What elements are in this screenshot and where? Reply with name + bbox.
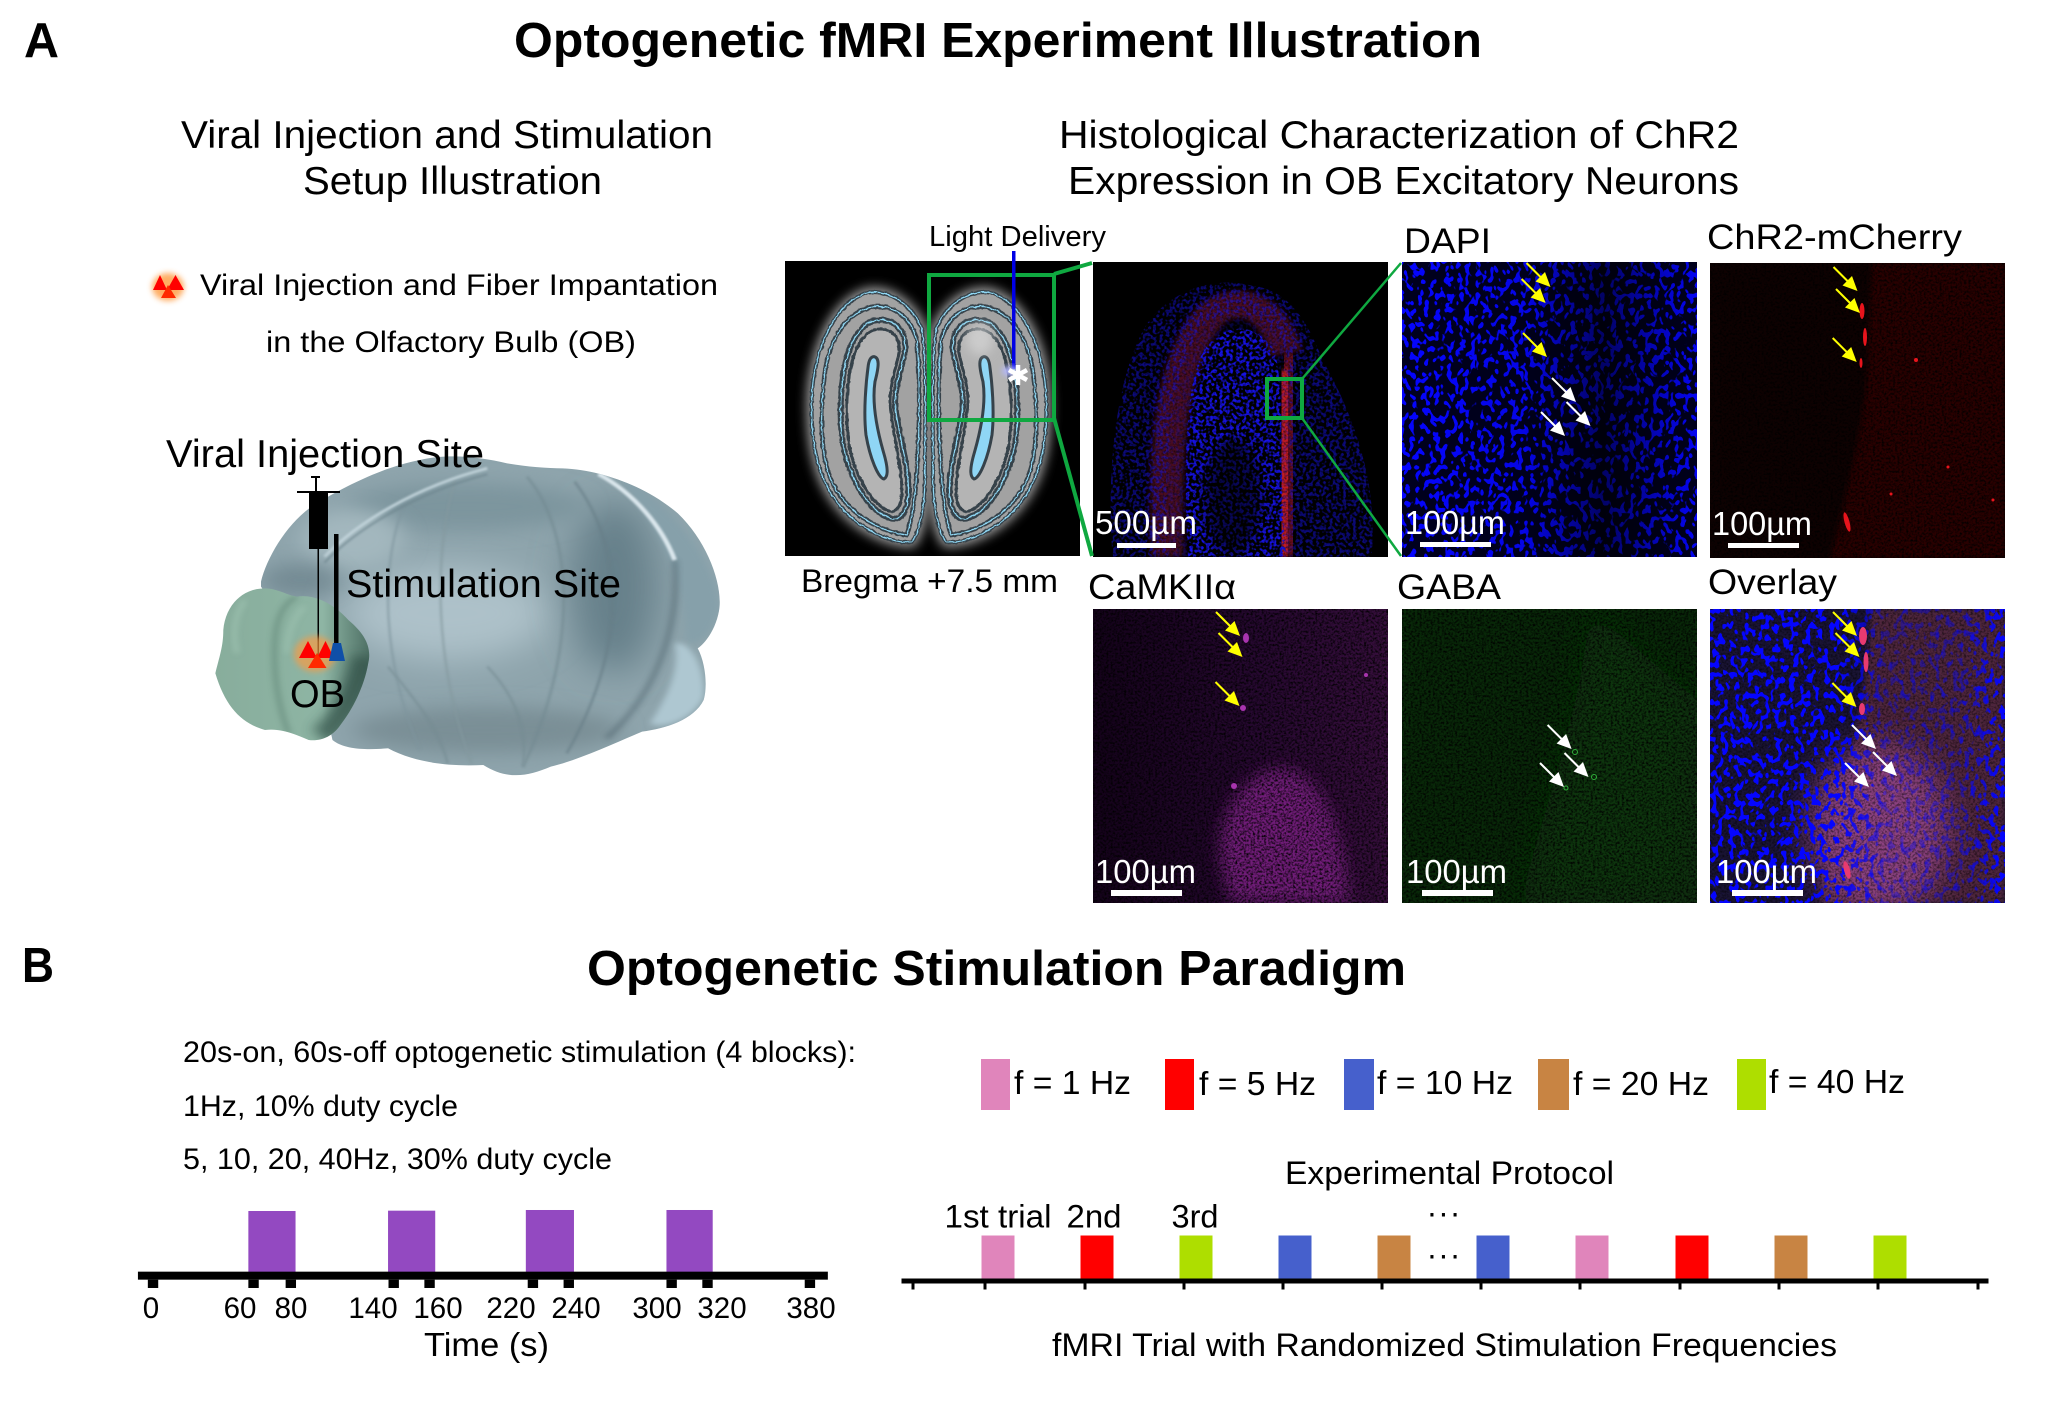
label: GABA: GABA xyxy=(1397,568,1502,607)
syringe xyxy=(297,476,340,657)
heading: histological characterization: Histological Characterization of ChR2 xyxy=(1059,114,1739,157)
arrows: yellow xyxy=(1832,612,1860,707)
trial labels: 3rd xyxy=(1172,1198,1218,1234)
tick labels: 80 xyxy=(275,1292,307,1325)
panel label A: A xyxy=(24,14,59,68)
stimulation asterisk xyxy=(1009,365,1027,385)
caption: Bregma +7.5 mm: Bregma +7.5 mm xyxy=(801,563,1058,599)
tick labels: 0 xyxy=(143,1292,159,1325)
label: ChR2-mCherry: ChR2-mCherry xyxy=(1707,218,1963,257)
panel: MRI slice at Bregma +7.5 mm xyxy=(785,251,1080,556)
chart: 20s-on 60s-off stimulation timeline xyxy=(138,1210,836,1363)
trial labels: 2nd xyxy=(1066,1198,1122,1234)
chart: randomized trial sequence xyxy=(902,1188,1988,1290)
arrows: yellow xyxy=(1522,263,1550,357)
heading: viral injection and stimulation setup: Setup Illustration xyxy=(303,160,602,203)
injection site marker xyxy=(294,636,336,672)
trial bars xyxy=(982,1236,1906,1280)
legend: stimulation frequencies: f = 40 Hz xyxy=(1769,1063,1905,1100)
panel: DAPI stain xyxy=(1402,262,1697,557)
olfactory bulb xyxy=(215,588,369,740)
legend: stimulation frequencies: f = 5 Hz xyxy=(1199,1065,1316,1102)
ellipsis marks: ... xyxy=(1428,1230,1460,1266)
tick labels: 320 xyxy=(697,1292,747,1325)
panel: whole olfactory bulb confocal section xyxy=(1093,262,1388,557)
light delivery fiber xyxy=(1012,251,1016,369)
legend: stimulation frequencies: f = 1 Hz xyxy=(1014,1064,1131,1101)
scale bar: 500 micrometres: 500µm xyxy=(1095,504,1197,541)
icon: viral injection marker xyxy=(152,273,184,301)
panel: overlay of all stains xyxy=(1710,609,2005,915)
tick labels: 220 xyxy=(486,1292,536,1325)
scale bar: 100µm xyxy=(1095,853,1196,890)
scale bar: 100µm xyxy=(1712,505,1812,542)
arrows: white xyxy=(1540,725,1588,787)
brain body xyxy=(261,456,720,775)
legend text: injection and fiber implantation xyxy=(200,269,718,359)
tick labels: 160 xyxy=(413,1292,463,1325)
scale bar: 100µm xyxy=(1405,504,1505,541)
heading: histological characterization xyxy=(1059,114,1739,203)
heading: histological characterization: Expression in OB Excitatory Neurons xyxy=(1068,160,1739,203)
arrows: yellow xyxy=(1216,612,1242,706)
illustration: rat brain with injection and stimulation sites xyxy=(166,433,720,775)
label: Overlay: Overlay xyxy=(1708,563,1838,602)
ellipsis marks xyxy=(1428,1188,1460,1266)
label: viral injection site: Viral Injection Site xyxy=(166,433,484,476)
time axis xyxy=(138,1272,828,1288)
stimulation blocks xyxy=(248,1210,713,1273)
legend: stimulation frequencies: f = 20 Hz xyxy=(1573,1065,1709,1102)
arrows: yellow xyxy=(1833,267,1860,362)
stimulation glow xyxy=(1002,366,1018,376)
label: stimulation site: Stimulation Site xyxy=(346,563,621,606)
arrows: white xyxy=(1541,378,1590,436)
trial labels: 1st trial xyxy=(944,1198,1052,1234)
panel: ChR2-mCherry stain xyxy=(1710,263,2005,558)
optical fiber xyxy=(334,534,338,644)
tick labels: 300 xyxy=(632,1292,682,1325)
axis title: Time (s) xyxy=(424,1326,549,1363)
title: Optogenetic fMRI Experiment Illustration: Optogenetic fMRI Experiment Illustration xyxy=(514,14,1482,68)
caption: fMRI trial with randomized frequencies: fMRI Trial with Randomized Stimulation Frequencies xyxy=(1052,1327,1837,1363)
panel: CaMKIIα stain xyxy=(1093,609,1388,903)
text block: stimulation description: 5, 10, 20, 40Hz, 30% duty cycle xyxy=(183,1143,612,1176)
legend: stimulation frequencies: f = 10 Hz xyxy=(1377,1064,1513,1101)
green inset box xyxy=(1267,379,1302,418)
stimulation fiber tip xyxy=(329,643,345,661)
tick labels xyxy=(143,1292,836,1325)
heading: viral injection and stimulation setup xyxy=(181,114,713,203)
green zoom box xyxy=(929,275,1054,420)
legend text: injection and fiber implantation: Viral Injection and Fiber Impantation xyxy=(200,269,718,302)
scale bar: 100µm xyxy=(1716,853,1817,890)
legend: stimulation frequencies xyxy=(981,1059,1905,1110)
heading: experimental protocol: Experimental Protocol xyxy=(1285,1155,1614,1191)
panel label B: B xyxy=(22,939,54,993)
panel: GABA stain xyxy=(1402,609,1697,903)
label: OB: OB xyxy=(290,673,345,716)
scale bar: 100µm xyxy=(1406,853,1507,890)
text block: stimulation description: 1Hz, 10% duty cycle xyxy=(183,1090,458,1123)
zoom connector lines xyxy=(1054,263,1401,556)
trial axis xyxy=(902,1278,1988,1290)
legend text: injection and fiber implantation: in the Olfactory Bulb (OB) xyxy=(266,326,636,359)
tick labels: 240 xyxy=(551,1292,601,1325)
tick labels: 380 xyxy=(786,1292,836,1325)
trial labels xyxy=(944,1198,1218,1234)
title: Optogenetic Stimulation Paradigm: Optogenetic Stimulation Paradigm xyxy=(587,942,1406,996)
tick labels: 60 xyxy=(224,1292,256,1325)
label: DAPI: DAPI xyxy=(1404,222,1491,261)
tick labels: 140 xyxy=(348,1292,398,1325)
arrows: white xyxy=(1845,725,1897,787)
heading: viral injection and stimulation setup: Viral Injection and Stimulation xyxy=(181,114,713,157)
ellipsis marks: ... xyxy=(1428,1188,1460,1224)
label: light delivery: Light Delivery xyxy=(929,221,1107,253)
text block: stimulation description xyxy=(183,1036,856,1176)
text block: stimulation description: 20s-on, 60s-off optogenetic stimulation (4 blocks): xyxy=(183,1036,856,1069)
label: CaMKIIα: CaMKIIα xyxy=(1088,568,1236,607)
